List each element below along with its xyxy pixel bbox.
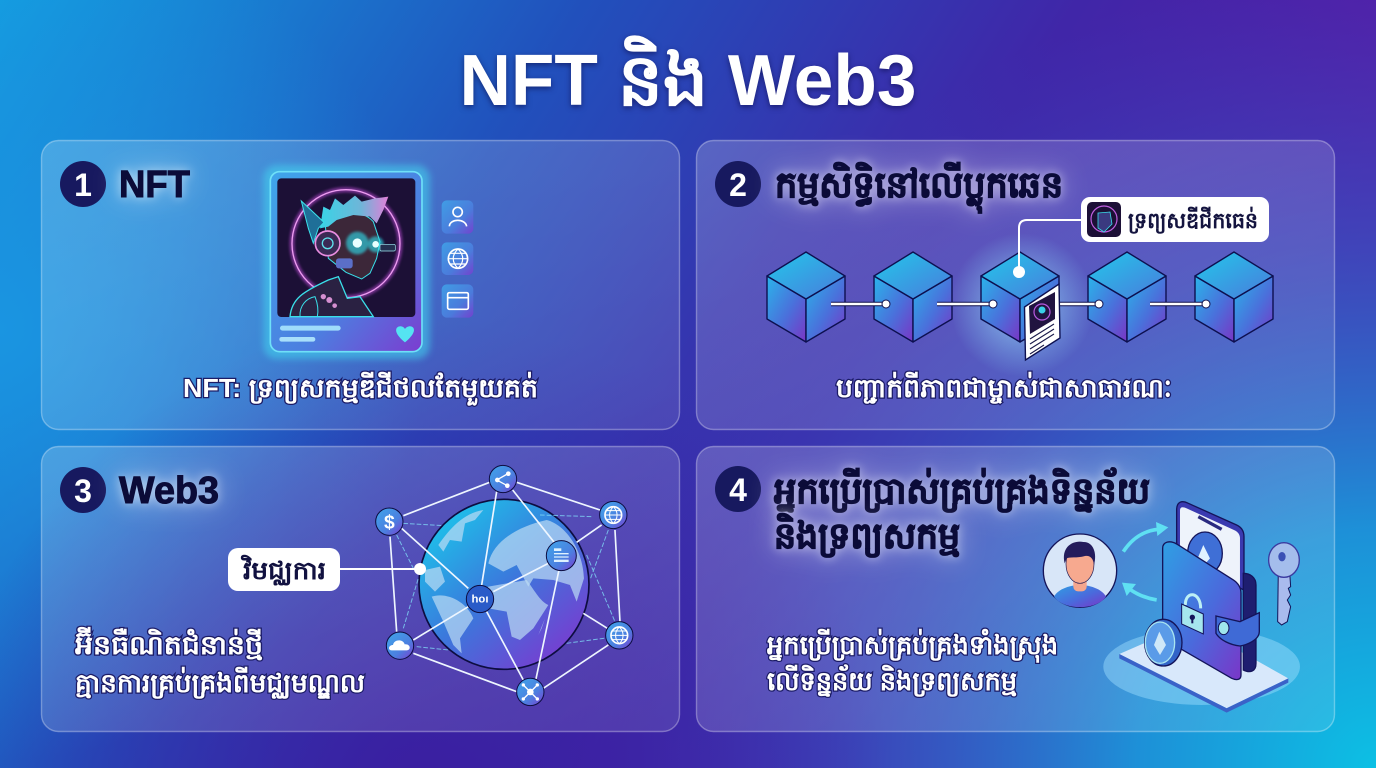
number badge 3: 3 bbox=[74, 473, 92, 509]
node: hub center bbox=[466, 585, 494, 613]
dashed links bbox=[397, 515, 615, 650]
number badge 2 bbox=[715, 161, 761, 207]
pointer from label to globe bbox=[340, 563, 426, 575]
panel background bbox=[42, 140, 680, 430]
callout: digital asset bbox=[1081, 197, 1269, 242]
label: decentralization: វិមជ្ឈការ bbox=[240, 554, 326, 586]
panel background bbox=[696, 446, 1334, 732]
heading: NFT: NFT bbox=[119, 164, 190, 206]
decentralized network globe bbox=[376, 465, 633, 706]
heading: users control data and assets bbox=[774, 467, 1150, 558]
panel: Web3 bbox=[42, 446, 680, 732]
NFT document on block bbox=[1024, 284, 1060, 360]
node: hub center: hoı bbox=[471, 593, 488, 605]
globe bbox=[419, 499, 589, 669]
cube 5 bbox=[1195, 252, 1273, 342]
caption: users fully control: អ្នកប្រើប្រាស់គ្រប់គ្រងទាំងស្រុង bbox=[767, 628, 1058, 663]
node: document bbox=[546, 541, 576, 571]
user, wallet and key illustration bbox=[1043, 502, 1300, 713]
NFT card illustration bbox=[263, 165, 430, 359]
chain connectors bbox=[831, 300, 1210, 308]
number badge 2: 2 bbox=[729, 167, 747, 203]
number badge 4: 4 bbox=[729, 472, 747, 508]
solid links bbox=[390, 482, 620, 692]
node: dollar: $ bbox=[384, 513, 395, 534]
icon: browser window bbox=[442, 284, 473, 318]
heading: users control data and assets: និងទ្រព្យសកម្ម bbox=[774, 513, 960, 558]
wallet bbox=[1163, 542, 1259, 680]
heading: ownership on blockchain: កម្មសិទ្ធិនៅលើប្លុកឆេន bbox=[775, 162, 1063, 214]
caption: new-generation internet bbox=[75, 626, 365, 699]
user avatar bbox=[1043, 534, 1117, 607]
node: cloud bbox=[386, 632, 414, 659]
panel background bbox=[42, 446, 680, 732]
caption: users fully control bbox=[767, 628, 1058, 697]
node: network bbox=[517, 678, 544, 706]
glow behind central block bbox=[950, 233, 1094, 377]
panel: on-chain ownership bbox=[696, 140, 1334, 430]
caption: new-generation internet: អ៊ីនធឺណិតជំនាន់ថ្មី bbox=[75, 626, 263, 661]
arrow to user bbox=[1122, 583, 1157, 600]
node: globe bbox=[600, 501, 627, 529]
heading: users control data and assets: អ្នកប្រើប្រាស់គ្រប់គ្រងទិន្នន័យ bbox=[774, 467, 1150, 513]
caption: public proof of ownership: បញ្ជាក់ពីភាពជាម្ចាស់ជាសាធារណៈ bbox=[836, 371, 1172, 404]
callout: digital asset: ទ្រព្យសឌីជីកធេន់ bbox=[1128, 206, 1258, 234]
caption: new-generation internet: គ្មានការគ្រប់គ្រងពីមជ្ឈមណ្ឌល bbox=[75, 666, 365, 699]
cube 1 bbox=[767, 252, 845, 342]
platform bbox=[1103, 623, 1300, 713]
padlock bbox=[1182, 595, 1203, 634]
cube 3 bbox=[981, 252, 1059, 342]
number badge 3 bbox=[60, 467, 106, 513]
icon: globe bbox=[442, 242, 473, 275]
icon: user bbox=[442, 200, 473, 234]
number badge 1 bbox=[60, 161, 106, 207]
panel: NFT bbox=[42, 140, 680, 430]
caption: users fully control: លើទិន្នន័យ និងទ្រព្យសកម្ម bbox=[767, 664, 1017, 697]
callout thumbnail bbox=[1087, 202, 1121, 237]
pointer from block to callout bbox=[1013, 220, 1090, 278]
panel: user control bbox=[696, 446, 1334, 732]
node: globe 2 bbox=[606, 622, 633, 649]
node: share bbox=[489, 465, 517, 493]
caption: NFT: NFT: ទ្រព្យសកម្មឌីជីថលតែមួយគត់ bbox=[183, 371, 538, 406]
title: NFT និង Web3 bbox=[460, 35, 916, 121]
label: decentralization bbox=[228, 548, 340, 591]
cube 4 bbox=[1088, 252, 1166, 342]
arrow to wallet bbox=[1123, 522, 1168, 552]
panel background bbox=[696, 140, 1334, 430]
heading: Web3: Web3 bbox=[119, 470, 219, 512]
coin bbox=[1145, 619, 1182, 666]
phone bbox=[1177, 502, 1244, 590]
node: dollar bbox=[376, 508, 403, 535]
key bbox=[1269, 543, 1299, 625]
number badge 1: 1 bbox=[74, 167, 92, 203]
blockchain of five cubes bbox=[767, 252, 1273, 342]
cube 2 bbox=[874, 252, 952, 342]
number badge 4 bbox=[715, 466, 761, 512]
